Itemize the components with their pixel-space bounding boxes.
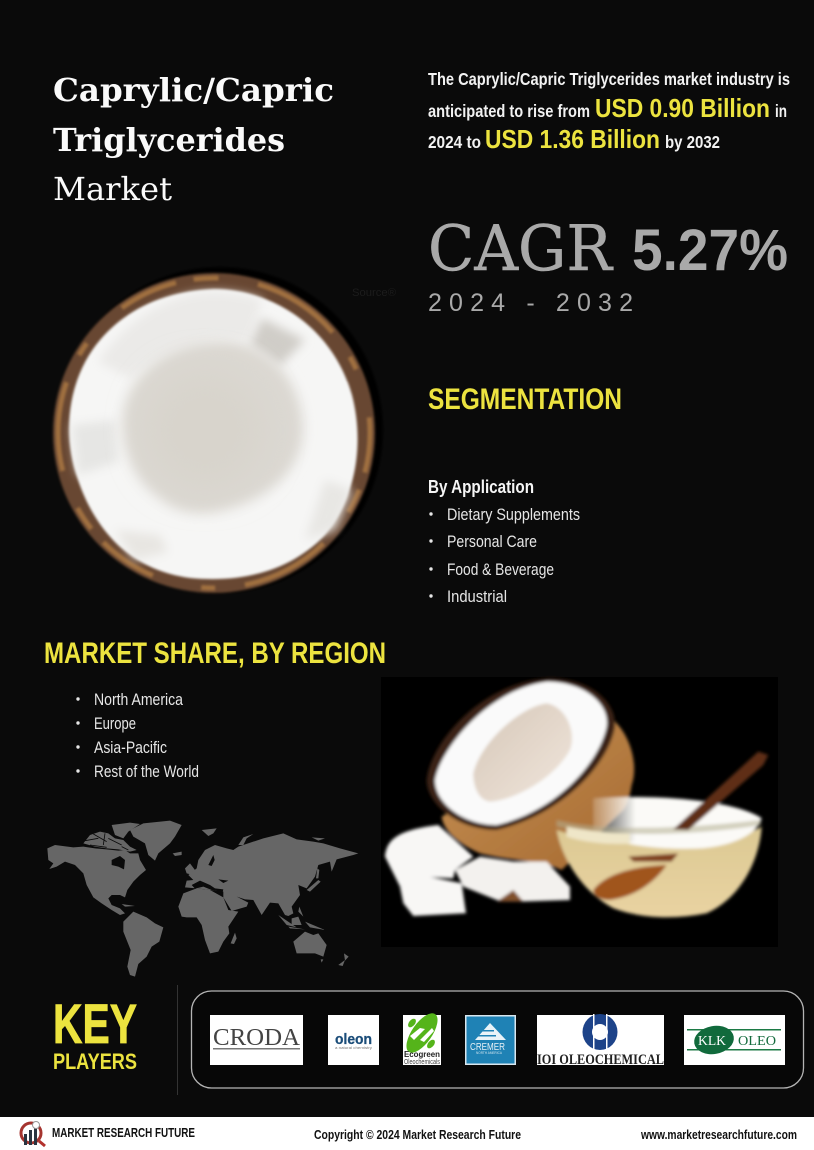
region list: Europe [94, 715, 136, 733]
heading: key players: PLAYERS [53, 1049, 137, 1074]
logo: Cremer: NORTH AMERICA [476, 1051, 503, 1055]
segmentation list: by application [428, 477, 580, 606]
logo: Cremer: CREMER [470, 1042, 505, 1053]
logo: Ecogreen: Oleochemicals [404, 1059, 440, 1066]
heading: market share by region: MARKET SHARE, BY REGION [44, 637, 386, 670]
region list: Rest of the World [94, 763, 199, 781]
market size statement: anticipated to rise from [428, 101, 590, 121]
region list: North America [94, 691, 184, 709]
market size statement [428, 69, 790, 154]
segmentation list: by application: Food & Beverage [447, 560, 554, 579]
logo: IOI Oleochemical: IOI OLEOCHEMICAL [537, 1052, 664, 1068]
region list: Asia-Pacific [94, 739, 167, 757]
logo: Ecogreen: Ecogreen [404, 1050, 440, 1059]
segmentation list: by application: Dietary Supplements [447, 505, 580, 524]
glass bowl with oil [557, 797, 762, 917]
CAGR figure [428, 212, 788, 285]
heading: key players [53, 992, 137, 1074]
title: Market [53, 170, 172, 208]
heading: key players: KEY [53, 992, 137, 1055]
forecast period: 2024 - 2032 [428, 289, 633, 317]
icon: market research future logo [21, 1122, 45, 1146]
segmentation list: by application: Personal Care [447, 532, 537, 551]
coconut flesh [427, 678, 615, 830]
logo: IOI Oleochemical [537, 1014, 664, 1068]
copyright: Copyright © 2024 Market Research Future [314, 1127, 521, 1142]
title: Caprylic/Capric [53, 71, 334, 109]
image: coconut half top view [53, 267, 383, 593]
faint source text: Source® [352, 287, 396, 299]
title: Triglycerides [53, 121, 285, 159]
segmentation list: by application: By Application [428, 477, 534, 497]
logo: Oleon [328, 1015, 379, 1065]
region list [76, 691, 199, 781]
logo: Croda: CRODA [213, 1025, 301, 1051]
market size statement: 2024 to [428, 132, 481, 152]
logo: KLK Oleo: KLK [698, 1034, 726, 1049]
market size statement: USD 1.36 Billion [485, 124, 660, 154]
panel: key player logos [192, 991, 804, 1088]
logo: KLK Oleo [684, 1015, 785, 1065]
CAGR figure: 5.27% [632, 218, 788, 283]
segmentation list: by application: Industrial [447, 587, 507, 606]
logo: Oleon: oleon [335, 1031, 372, 1048]
coconut husk [442, 720, 634, 870]
footer [0, 1117, 814, 1150]
heading: segmentation: SEGMENTATION [428, 383, 622, 416]
title [53, 71, 334, 208]
logo: Croda [210, 1015, 303, 1065]
market size statement: USD 0.90 Billion [595, 93, 770, 123]
CAGR figure: CAGR [428, 212, 613, 285]
logo: KLK Oleo: OLEO [738, 1034, 776, 1049]
brand name: MARKET RESEARCH FUTURE [52, 1125, 195, 1140]
logo: Cremer [465, 1015, 516, 1065]
image: coconut with oil bowl [381, 677, 778, 947]
logo: Ecogreen [401, 1008, 443, 1066]
world map [47, 821, 358, 977]
divider [177, 985, 178, 1095]
market size statement: in [775, 101, 787, 121]
logo: Oleon: a natural chemistry [335, 1045, 372, 1050]
coconut chunks [385, 825, 570, 916]
market size statement: by 2032 [665, 132, 720, 152]
wooden spoon [593, 752, 768, 900]
